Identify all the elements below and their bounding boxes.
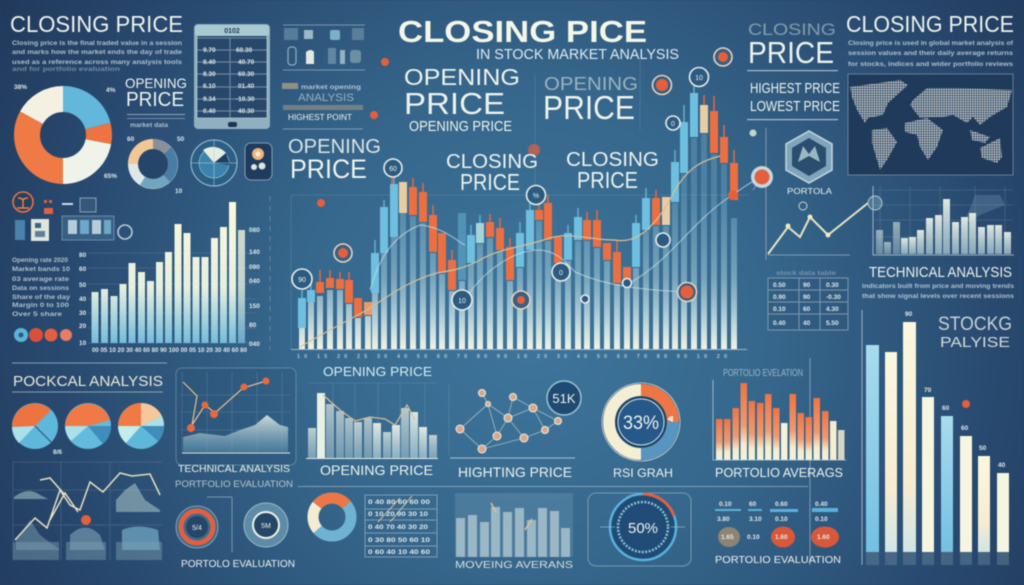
text block: indicators built from price and moving trends	[862, 283, 1014, 290]
bars	[716, 383, 844, 460]
panel: portfolio values: 0.60	[775, 501, 788, 508]
moving average line: tan	[300, 156, 720, 347]
heading: STOCKG	[938, 314, 1012, 335]
table: lower: 0 10 20 90 30 10	[368, 511, 428, 518]
marker line and circle	[750, 128, 773, 260]
phone table: 60.30	[238, 71, 255, 78]
marker circles: 10	[695, 75, 703, 82]
network chart: highest price	[449, 381, 581, 458]
table: lower	[365, 495, 437, 557]
table: right: 40	[803, 320, 811, 327]
text block: that show signal levels over recent sessions	[862, 293, 1014, 300]
bar chart: left: 30	[79, 310, 87, 317]
pie 2	[65, 403, 111, 449]
bar chart: left: 080	[249, 227, 260, 234]
phone table: -10.30	[236, 96, 255, 103]
heading block: closing price right: LOWEST PRICE	[750, 98, 840, 115]
marker circles: 0	[671, 121, 675, 128]
table: right: 4.30	[826, 306, 839, 313]
table: right: 0.10	[773, 306, 786, 313]
bar chart: left: 040	[249, 278, 260, 285]
phone table: 60.30	[236, 47, 253, 54]
label: PORTOLIO AVERAGS	[715, 466, 843, 480]
icon row: small tools	[13, 192, 132, 241]
panel: closing price and world map	[846, 11, 1014, 175]
phone table: 0102	[224, 28, 240, 35]
chart grid and axis	[291, 60, 750, 360]
icons: four dots	[14, 328, 72, 342]
panel: moving averages	[455, 493, 573, 571]
gauge: 50 percent: 50%	[628, 520, 658, 537]
text block: left notes: Market bands 10	[12, 266, 70, 273]
text block: highest point	[282, 83, 363, 129]
table: right	[768, 270, 848, 330]
phone table: 01.40	[238, 83, 255, 90]
bar labels: 60	[942, 405, 950, 412]
heading block: opening price 1: OPENING PRICE	[409, 118, 512, 135]
bar chart: left: 80	[79, 252, 87, 259]
marker circles: 0	[559, 270, 563, 277]
heading block: closing price right: HIGHEST PRICE	[750, 80, 840, 97]
heading	[12, 363, 167, 392]
heading bottom: OPENING PRICE	[320, 462, 433, 478]
bar chart: left: 40	[79, 296, 87, 303]
heading: closing price: CLOSING PRICE	[10, 11, 183, 37]
text block: intro: used as a reference across many analysis tools	[12, 59, 182, 66]
panel: technical analysis	[862, 264, 1014, 300]
background volume bars	[299, 134, 737, 349]
panel: portfolio values: 60	[749, 501, 757, 508]
line chart with mountains	[13, 462, 162, 560]
panel: portfolio values: 0.40	[815, 501, 828, 508]
text block	[848, 40, 1014, 68]
line chart: portfolio	[768, 196, 882, 255]
heading: opening price small: market data	[130, 122, 168, 129]
icon: radar dial	[191, 140, 237, 186]
heading block: opening price 2: OPENING	[544, 74, 638, 94]
text block: left notes: Opening rate 2020	[12, 257, 68, 264]
phone table: 6.10	[203, 83, 216, 90]
bar labels: 70	[924, 387, 932, 394]
value pills: 1.60	[817, 534, 830, 541]
bar chart: left: 090	[249, 264, 260, 271]
table: right: 0.50	[773, 282, 786, 289]
phone table: 9.70	[203, 47, 216, 54]
bar chart: left: 10	[79, 340, 87, 347]
panel: stock analysis big bars	[862, 310, 1012, 565]
label: technical analysis: TECHNICAL ANALYSIS	[178, 463, 290, 475]
marker circles: 10	[458, 298, 466, 305]
phone table	[194, 24, 270, 129]
text block	[862, 283, 1014, 300]
panel: portfolio values: 0.10	[719, 501, 732, 508]
panel: portfolio values: 0.10	[815, 516, 828, 523]
table: right: -0.30	[826, 294, 841, 301]
gauge: RSI	[602, 383, 680, 461]
heading: PORTOLIO EVELATION	[723, 368, 803, 379]
candles: blue	[298, 93, 698, 328]
table: lower: 0 30 80 50 60 10	[368, 537, 430, 544]
label: highting price: HIGHTING PRICE	[458, 464, 572, 480]
donut labels: 4%	[106, 87, 116, 94]
panel: portfolio values: 0.10	[775, 516, 788, 523]
gauge: portfolio left	[176, 497, 232, 552]
bar chart: left: 040	[249, 341, 260, 348]
label: portfolio evaluation: PORTFOLIO EVALUATION	[175, 479, 293, 490]
title: closing pice: CLOSING PICE	[398, 14, 647, 49]
panel: technical analysis line chart	[176, 368, 296, 465]
phone table: 9.34	[203, 96, 216, 103]
gauge: portfolio left: 5/4	[192, 525, 202, 532]
table: right: 0.40	[773, 320, 786, 327]
heading: opening price small	[125, 75, 187, 129]
bar chart: left: 140	[249, 249, 260, 256]
moving average line: light	[370, 177, 762, 300]
icon panel: top small icons	[283, 25, 365, 70]
value pills: 1.65	[721, 534, 734, 541]
chart	[306, 383, 438, 458]
heading block: closing price 1: PRICE	[460, 169, 520, 195]
table: lower: 0 60 40 10 40 60	[368, 549, 430, 556]
text block: intro: Closing price is the final traded value in a session	[12, 40, 182, 47]
small donut: 50	[177, 136, 185, 143]
bar chart: left	[79, 202, 260, 354]
panel: opening price chart	[306, 364, 438, 478]
divider lines	[298, 358, 810, 565]
panel: portfolio evaluation bars	[713, 368, 846, 480]
wicks	[302, 85, 694, 298]
heading: opening price small: PRICE	[126, 89, 184, 111]
bar chart: left: 80	[249, 322, 257, 329]
heading: CLOSING PRICE	[846, 11, 1014, 37]
pie 3	[118, 403, 164, 449]
bar chart: right area	[873, 186, 1014, 255]
heading block: opening price 3: PRICE	[290, 154, 367, 184]
panel: closing price intro	[10, 11, 183, 73]
heading block: opening price 3	[288, 136, 381, 184]
heading	[938, 314, 1012, 351]
label: portola: PORTOLA	[787, 187, 833, 196]
heading block: opening price 1: OPENING	[404, 64, 520, 90]
heading: POCKCAL ANALYSIS	[13, 373, 163, 390]
wicks orange	[320, 95, 734, 282]
label: portolo evaluation: PORTOLO EVALUATION	[181, 559, 295, 570]
label: MOVEING AVERANS	[455, 559, 573, 571]
text block: left notes: 03 average rate	[12, 276, 69, 283]
text block: session values and their daily average returns	[848, 50, 1013, 57]
donut labels: 38%	[14, 84, 27, 91]
text block: left notes: Margin 0 to 100	[12, 302, 69, 309]
network chart: highest price: 51K	[552, 391, 576, 406]
phone table: 8.40	[203, 59, 216, 66]
heading block: closing price 2: PRICE	[577, 167, 638, 193]
chart grid and axis: 10 15 20 25 30 40 50 60 70 80 90 10 20 30 40 50 60 70 80 90 10 20	[297, 354, 727, 360]
text block: left notes: Over 5 share	[12, 311, 62, 318]
pie 1	[12, 403, 58, 449]
text block: left notes: Share of the day	[12, 294, 70, 301]
phone table: 8.30	[203, 71, 216, 78]
text block: intro: and marks how the market ends the day of trade	[12, 49, 182, 56]
bar chart: left: 20	[79, 323, 87, 330]
bar chart: left: 60	[79, 266, 87, 273]
label: PORTOLIO EVALUATION	[715, 555, 841, 566]
heading block: closing price right: CLOSING	[748, 20, 836, 39]
bar labels	[905, 311, 1006, 469]
donut labels	[14, 84, 117, 180]
text block: intro: and for portfolio evaluation	[12, 66, 120, 73]
donut chart: large	[27, 99, 99, 171]
bar chart: left: 150	[249, 303, 260, 310]
value pills: 0.10	[747, 534, 760, 541]
table: right: 90	[803, 282, 811, 289]
heading block: closing price 2	[566, 149, 659, 193]
heading block: closing price 1	[446, 151, 538, 195]
marker circles: 60	[389, 166, 397, 173]
value pills: 1.60	[775, 534, 788, 541]
small donut	[127, 136, 185, 195]
table: right: 0.30	[826, 282, 839, 289]
table: right: 60	[803, 306, 811, 313]
bars	[862, 310, 1009, 565]
marker circles: 90	[298, 277, 306, 284]
heading block: opening price 1: PRICE	[404, 86, 505, 121]
donut labels: 65%	[104, 173, 117, 180]
table: right: 5.50	[826, 320, 839, 327]
gauge: portfolio right	[244, 503, 288, 547]
bar labels: 60	[961, 425, 969, 432]
heading block: closing price right: PRICE	[748, 35, 834, 70]
icon: rounded badge	[245, 143, 272, 180]
panel: portfolio values: 3.10	[749, 516, 762, 523]
label: RSI: RSI GRAH	[613, 466, 673, 480]
panel: portfolio values	[715, 501, 841, 566]
text block: Closing price is used in global market analysis of	[848, 40, 1014, 47]
table: right: 90	[803, 294, 811, 301]
table: lower: 0 40 80 60 60 00	[368, 499, 430, 506]
text block: left notes: Data on sessions	[12, 285, 69, 292]
gauge: portfolio right: 5M	[261, 523, 271, 530]
heading block: opening price 3: OPENING	[288, 136, 381, 158]
panel: portfolio values: 3.80	[717, 516, 730, 523]
phone table: 40.70	[238, 59, 255, 66]
table: right: stock data table	[776, 270, 836, 277]
text block: highest point: market opening	[301, 84, 361, 91]
icon: hexagon badge	[786, 131, 832, 183]
dashed divider	[269, 196, 271, 350]
bar chart: left: 00 05 10 20 30 40 60 80 90 100 00 05 10 20 30 40 60 80	[92, 347, 247, 354]
bar labels: 50	[979, 445, 987, 452]
heading block: closing price 1: CLOSING	[446, 151, 538, 173]
heading top: OPENING PRICE	[323, 364, 432, 379]
heading block: closing price right	[747, 20, 840, 120]
world map	[848, 74, 1013, 175]
small label: 8/6	[53, 449, 62, 456]
heading block: closing price 2: CLOSING	[566, 149, 659, 171]
marker circles	[292, 48, 738, 310]
text block: highest point: ANALYSIS	[298, 92, 354, 104]
donut: lower	[313, 498, 351, 536]
heading block: opening price 1	[404, 64, 520, 135]
bar chart: left: 50	[79, 282, 87, 289]
gauge: RSI: 33%	[623, 413, 659, 434]
panel: pocket analysis	[12, 363, 167, 560]
candlestick chart	[291, 48, 762, 360]
table: right: 0.90	[773, 294, 786, 301]
phone table: 40.30	[238, 108, 255, 115]
candles: orange	[316, 111, 738, 317]
bar labels: 40	[998, 462, 1006, 469]
gauge: 50 percent	[588, 493, 691, 566]
small donut: 10	[175, 188, 183, 195]
heading block: opening price 2	[543, 74, 638, 126]
heading: PALYISE	[940, 334, 1010, 351]
phone table: 0.40	[203, 108, 216, 115]
heading block: opening price 2: PRICE	[543, 89, 635, 126]
heading: opening price small: OPENING	[125, 75, 187, 91]
text block: highest point: HIGHEST POINT	[288, 112, 352, 122]
value pills	[718, 526, 839, 548]
subtitle: IN STOCK MARKET ANALYSIS	[476, 46, 679, 63]
text block: intro	[12, 40, 182, 73]
text block: for stocks, indices and wider portfolio reviews	[848, 61, 1013, 68]
text block: left notes	[12, 257, 70, 318]
marker circles: %	[533, 193, 539, 200]
bar labels: 90	[905, 311, 913, 318]
table: lower: 0 40 70 40 30 20	[368, 524, 428, 531]
candles: cream	[364, 105, 708, 315]
small donut: 60	[127, 136, 135, 143]
